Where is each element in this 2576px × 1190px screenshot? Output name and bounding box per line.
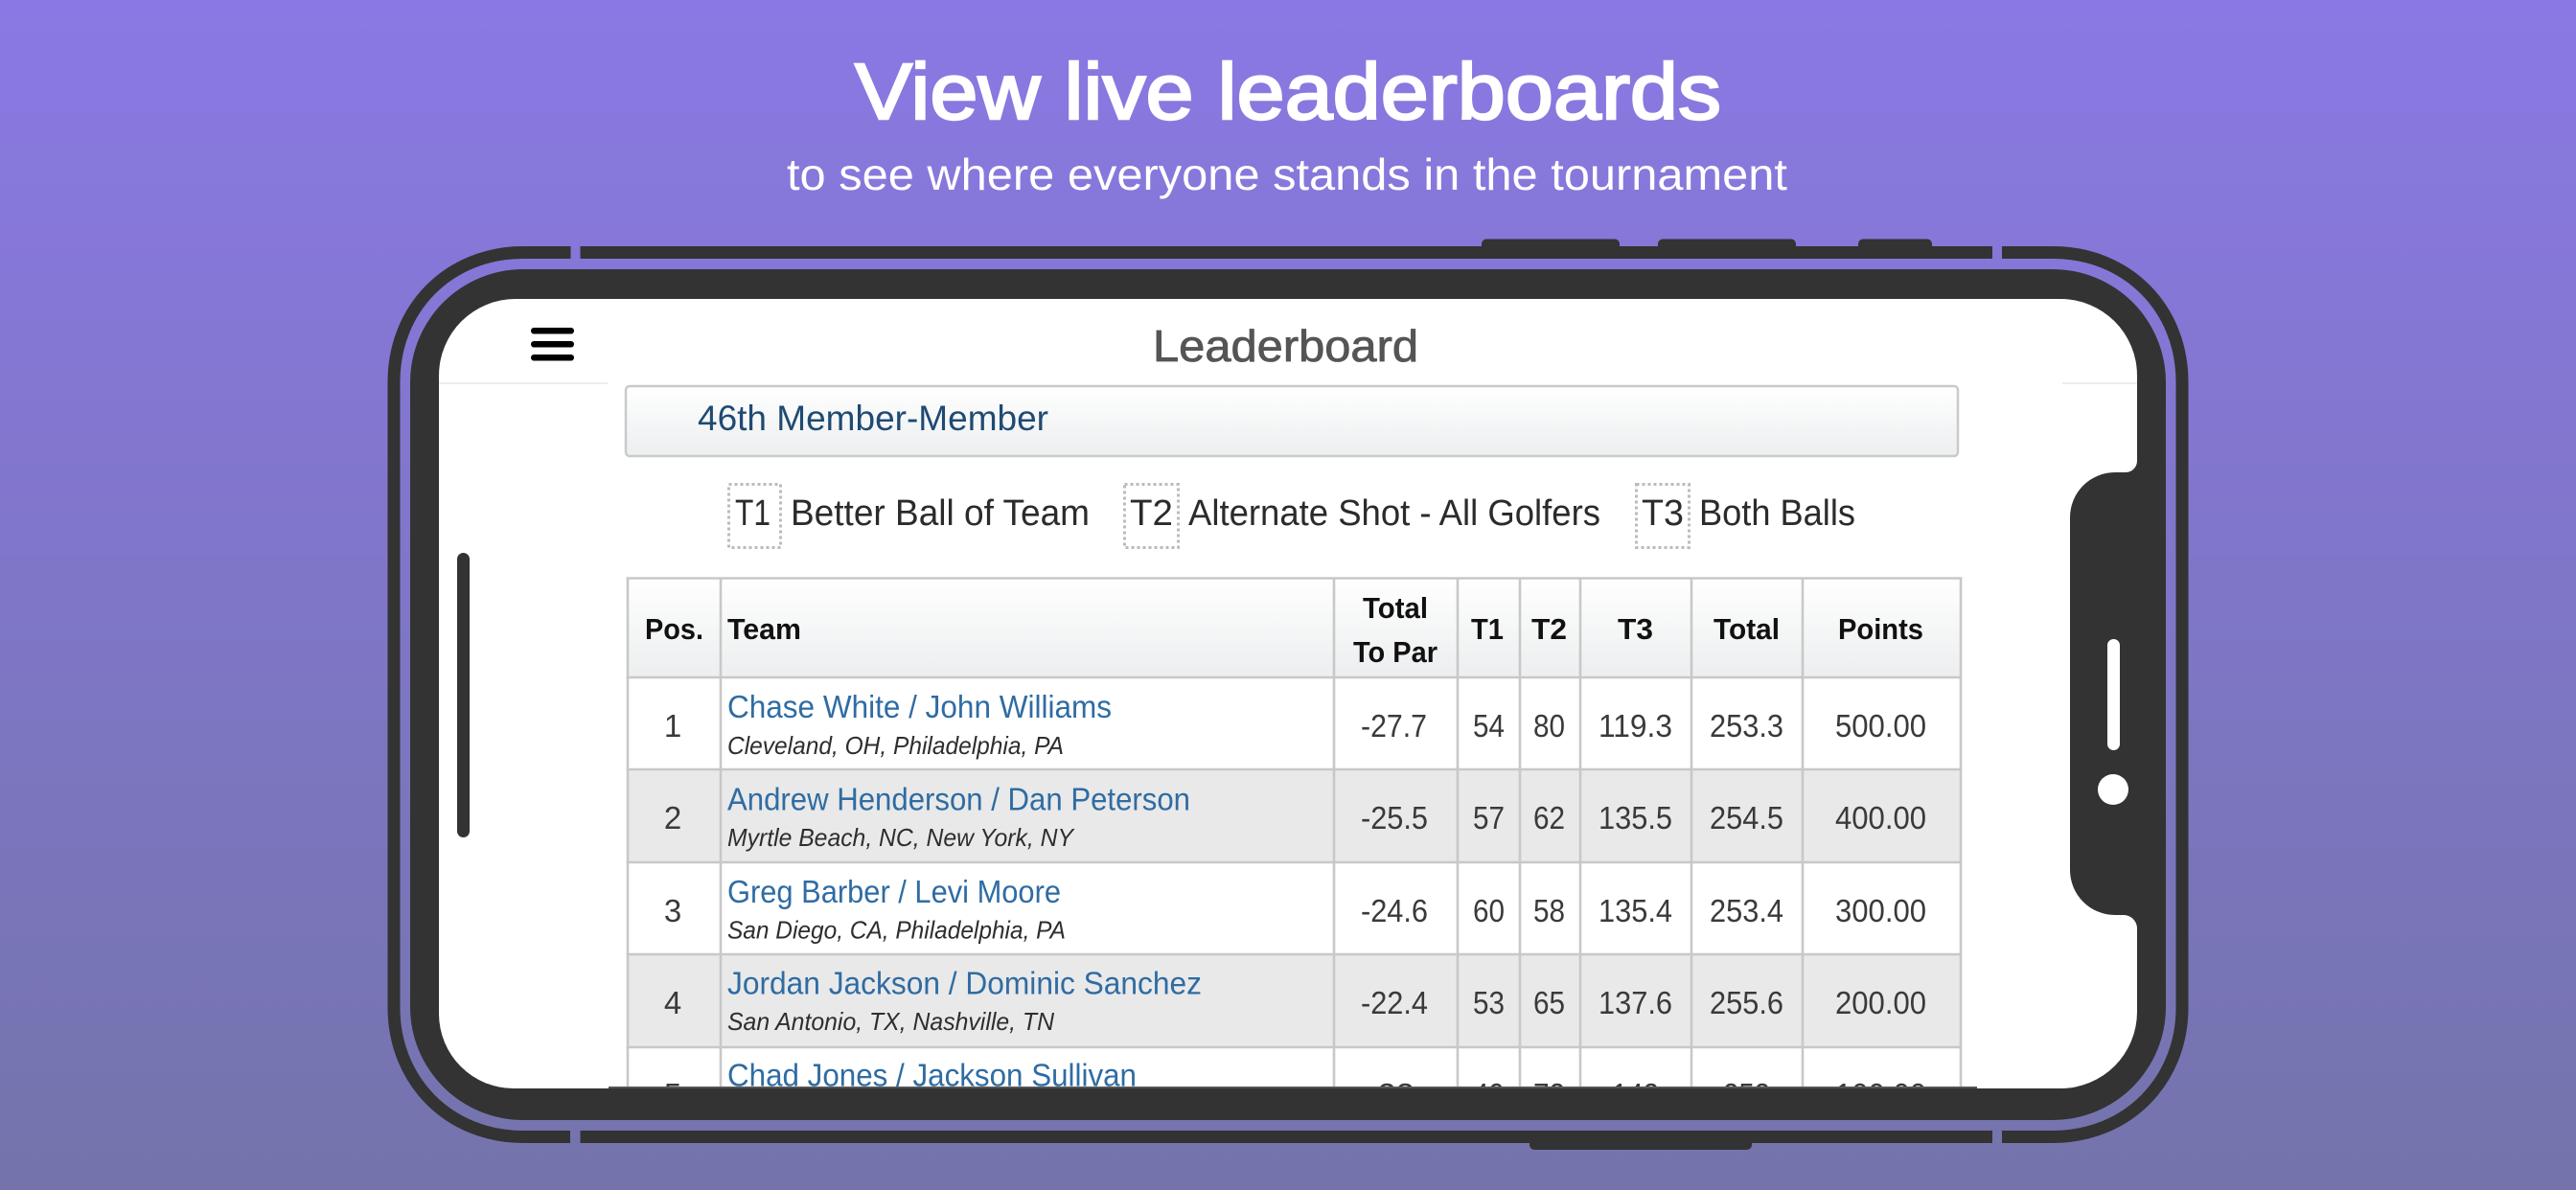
row 2: 135.5: [1598, 800, 1672, 835]
table header row: To Par: [1353, 635, 1438, 669]
phone body: [410, 269, 2166, 1120]
legend: [728, 485, 1855, 548]
row 3: Greg Barber / Levi Moore: [727, 874, 1061, 909]
side button bottom: [1530, 1136, 1752, 1150]
row 4: 255.6: [1710, 985, 1783, 1020]
row 4: 137.6: [1598, 985, 1672, 1020]
tournament name bar: [626, 386, 1958, 456]
table grid: [627, 578, 1963, 1092]
legend T3: T3: [1642, 493, 1684, 534]
screen bottom edge line: [609, 1087, 1977, 1088]
row 3: [664, 874, 1926, 945]
row 5 clipped: 72: [1533, 1077, 1565, 1112]
row 2: 57: [1473, 800, 1505, 835]
row 1: 253.3: [1710, 708, 1783, 744]
speaker slot: [2107, 639, 2120, 750]
row 2: 62: [1533, 800, 1565, 835]
row 1: 80: [1533, 708, 1565, 744]
row 4: 53: [1473, 985, 1505, 1020]
row 2: 2: [664, 800, 681, 835]
row 3: 58: [1533, 893, 1565, 928]
side button top 2: [1658, 240, 1796, 253]
row 2: -25.5: [1361, 800, 1428, 835]
camera: [2098, 774, 2128, 805]
row 3: 60: [1473, 893, 1505, 928]
row 3: 3: [664, 893, 681, 928]
row 3: 300.00: [1835, 893, 1926, 928]
row 1: [664, 689, 1926, 760]
legend T1: [728, 485, 1090, 548]
row 1: 500.00: [1835, 708, 1926, 744]
phone: [394, 240, 2182, 1150]
row 5 clipped: Chad Jones / Jackson Sullivan: [727, 1058, 1137, 1092]
row 4: 200.00: [1835, 985, 1926, 1020]
legend T3: Both Balls: [1699, 493, 1855, 534]
row 2: [664, 782, 1926, 852]
row 3: 253.4: [1710, 893, 1783, 928]
row 3: 135.4: [1598, 893, 1672, 928]
row 5 clipped: [666, 1064, 1924, 1087]
title: View live leaderboards: [855, 47, 1721, 136]
legend T2: Alternate Shot - All Golfers: [1188, 493, 1600, 534]
row 4: 65: [1533, 985, 1565, 1020]
left side bar: [457, 553, 470, 837]
table header row: [646, 597, 1922, 663]
legend T2: [1125, 485, 1600, 548]
row 4: -22.4: [1361, 985, 1428, 1020]
table header row: Total: [1714, 612, 1780, 646]
row 5 clipped: 5: [664, 1077, 681, 1112]
table header row: T3: [1618, 612, 1653, 646]
legend T2: T2: [1130, 493, 1173, 534]
row 2: 254.5: [1710, 800, 1783, 835]
row 2: Myrtle Beach, NC, New York, NY: [727, 823, 1075, 852]
row 5 clipped: -23: [1367, 1077, 1414, 1112]
row 1: Chase White / John Williams: [727, 689, 1112, 724]
table header row: Pos.: [645, 612, 703, 646]
legend T3: [1637, 485, 1855, 548]
subtitle: to see where everyone stands in the tournament: [787, 149, 1787, 199]
table fills: [628, 578, 1961, 1047]
row 2: Andrew Henderson / Dan Peterson: [727, 782, 1190, 816]
side button top 1: [1482, 240, 1620, 253]
row 4: [665, 972, 1925, 1033]
table header row: T2: [1531, 612, 1567, 646]
table header row: Team: [727, 612, 801, 646]
row 3: San Diego, CA, Philadelphia, PA: [727, 916, 1066, 945]
phone screen: [439, 299, 2137, 1088]
row 5 clipped: 142: [1612, 1077, 1659, 1112]
hamburger menu icon: [531, 328, 574, 360]
row 1: 119.3: [1598, 708, 1672, 744]
row 1: 1: [664, 708, 681, 744]
row 1: Cleveland, OH, Philadelphia, PA: [727, 731, 1064, 760]
row 4: 4: [664, 985, 681, 1020]
legend T1: T1: [735, 493, 770, 534]
row 5 clipped: 252: [1723, 1077, 1770, 1112]
nav divider: [439, 382, 2137, 384]
table header row: Total: [1363, 591, 1428, 625]
row 1: -27.7: [1361, 708, 1427, 744]
row 1: 54: [1473, 708, 1505, 744]
phone outer ring: [394, 253, 2182, 1136]
table header row: T1: [1471, 612, 1504, 646]
row 5 clipped: 49: [1473, 1077, 1505, 1112]
legend T1: Better Ball of Team: [791, 493, 1090, 534]
leaderboard table: [627, 578, 1963, 1112]
row 4: San Antonio, TX, Nashville, TN: [727, 1007, 1054, 1036]
side button top 3: [1858, 240, 1932, 253]
tournament name bar: 46th Member-Member: [698, 399, 1048, 438]
row 4: Jordan Jackson / Dominic Sanchez: [727, 966, 1202, 1000]
table header row: Points: [1838, 612, 1923, 646]
row 3: -24.6: [1361, 893, 1428, 928]
row 2: 400.00: [1835, 800, 1926, 835]
row 5 clipped: 100.00: [1835, 1077, 1926, 1112]
screen heading: Leaderboard: [1153, 321, 1418, 371]
